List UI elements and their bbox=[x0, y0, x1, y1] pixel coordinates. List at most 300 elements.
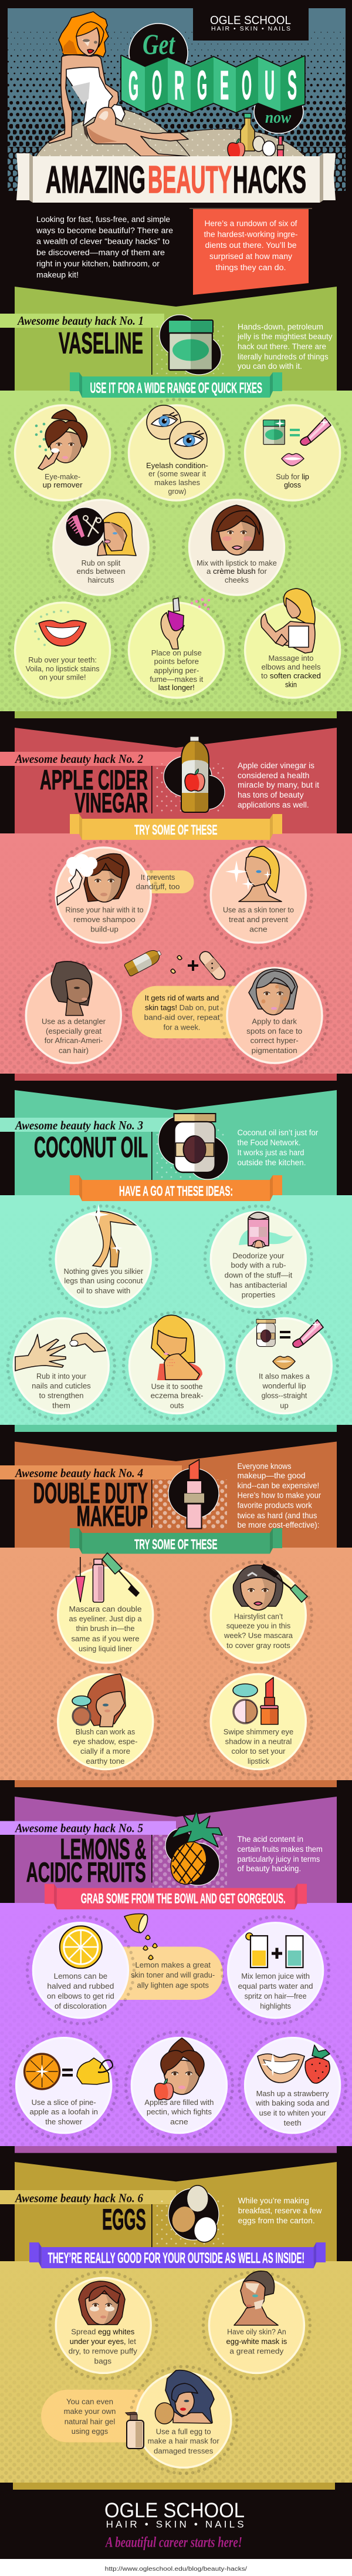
vaseline tips background bbox=[0, 391, 352, 718]
hack 2 description: has tons of beauty bbox=[238, 791, 304, 799]
tip: hair mask bbox=[126, 2366, 237, 2473]
tip text: acne bbox=[249, 926, 268, 934]
tip text: squeeze you in this bbox=[226, 1622, 290, 1630]
tip: lip gloss straight up bbox=[231, 1312, 337, 1419]
tip text bbox=[69, 2328, 138, 2366]
tip text bbox=[226, 2328, 287, 2355]
icon: vinegar bottle bbox=[151, 737, 226, 813]
callout text: dandruff bbox=[136, 873, 180, 891]
tip text: earthy tone bbox=[86, 1757, 125, 1765]
makeup header background bbox=[15, 1441, 337, 1551]
hack 1 description: you can do with it. bbox=[238, 362, 302, 371]
tip text: skin bbox=[285, 681, 297, 689]
icon: lemon slice bbox=[60, 1926, 102, 1968]
tip text: gloss bbox=[284, 481, 301, 489]
icon: lemon juice plus water bbox=[246, 1933, 303, 1968]
tip text: Use as a detangler bbox=[42, 1018, 106, 1026]
tip text: week? Use mascara bbox=[224, 1632, 293, 1640]
tip text: It also makes a bbox=[259, 1373, 310, 1381]
hack 1 title: VASELINE bbox=[59, 327, 143, 359]
tip text: lipstick bbox=[248, 1757, 270, 1765]
tip text: cheeks bbox=[225, 576, 249, 584]
woman in towel illustration bbox=[48, 12, 188, 156]
intro callout: red box: the hardest-working ingre- bbox=[204, 230, 298, 238]
tip text: nails and cuticles bbox=[32, 1382, 91, 1390]
tip text: make a hair mask for bbox=[148, 2437, 219, 2446]
footer logo: OGLE SCHOOL bbox=[104, 2499, 245, 2522]
tip: mascara on gray roots bbox=[205, 1562, 312, 1669]
icon: compact and orange lipstick bbox=[233, 1677, 278, 1724]
tip text: cially if a more bbox=[80, 1747, 130, 1756]
tip text: equal parts water and bbox=[238, 1982, 313, 1990]
icon: woman with apple bbox=[154, 2038, 204, 2100]
callout: warts and skin tags: for a week. bbox=[163, 1024, 201, 1032]
tip text: legs than using coconut bbox=[64, 1277, 143, 1285]
panel: hack 6 eggs bbox=[0, 2162, 352, 2490]
tip: apples and pectin bbox=[126, 2032, 232, 2139]
tip text: thin brush in—the bbox=[76, 1625, 135, 1633]
icon: blue-haired woman with egg bbox=[155, 2370, 214, 2424]
tip text: on elbows to get rid bbox=[47, 1992, 114, 2000]
vaseline header background bbox=[15, 287, 337, 394]
tip: strawberry whitening bbox=[239, 2032, 346, 2139]
hack 5 description: of beauty hacking. bbox=[237, 1864, 301, 1873]
icon: blonde woman with eczema bbox=[151, 1315, 202, 1380]
footer logo: HAIR • SKIN • NAILS bbox=[106, 2519, 244, 2530]
tip: detangler bbox=[20, 961, 127, 1069]
tip text: eczema break- bbox=[151, 1392, 204, 1400]
tip text: pigmentation bbox=[252, 1047, 297, 1055]
hack 1 description: literally hundreds of things bbox=[238, 352, 329, 361]
panel: hack 3 coconut oil bbox=[0, 1090, 352, 1432]
Gorgeous zigzag banner: E bbox=[220, 62, 229, 108]
hack 6 ribbon bbox=[29, 2242, 326, 2268]
callout: hair gel: natural hair gel bbox=[65, 2417, 115, 2426]
tip text: same as if you were bbox=[72, 1635, 140, 1643]
tip text: Massage into bbox=[269, 654, 314, 663]
hack 4 description: kind--can be expensive! bbox=[237, 1481, 319, 1490]
hack 5 description: particularly juicy in terms bbox=[237, 1855, 320, 1864]
tip text: (especially great bbox=[46, 1027, 102, 1035]
tip text: pectin, which fights bbox=[147, 2108, 212, 2116]
hack 1 description: Hands-down, petroleum bbox=[238, 322, 323, 331]
tip text bbox=[146, 462, 208, 496]
intro text: be discovered—many of them are bbox=[36, 248, 165, 257]
tip text: oil to shave with bbox=[77, 1287, 130, 1295]
tip text: Mash up a strawberry bbox=[256, 2090, 329, 2098]
hack 4 description: be more cost-effective): bbox=[237, 1521, 319, 1529]
Gorgeous zigzag banner: U bbox=[265, 62, 275, 108]
icon: shaved legs bbox=[88, 1204, 136, 1267]
hack 3 title: COCONUT OIL bbox=[34, 1132, 148, 1163]
hack 2 title bbox=[40, 764, 148, 818]
tip text: Sub for lip bbox=[276, 473, 309, 481]
tip text: grow) bbox=[168, 487, 187, 496]
hack 1 description: hack out there. There are bbox=[238, 342, 326, 351]
hack 2 description: applications as well. bbox=[238, 801, 309, 809]
tip text: on your smile! bbox=[39, 674, 86, 682]
logo box: HAIR • SKIN • NAILS bbox=[211, 25, 290, 32]
tip text: down of the stuff—it bbox=[225, 1271, 293, 1279]
lemons tips background bbox=[0, 1903, 352, 2153]
footer logo bbox=[104, 2499, 245, 2550]
icon: blonde woman with sparkles bbox=[225, 846, 282, 902]
hack 6 description: breakfast, reserve a few bbox=[238, 2207, 322, 2215]
tip text: Use as a skin toner to bbox=[223, 906, 294, 914]
tip text: Nothing gives you silkier bbox=[64, 1267, 143, 1276]
tip text: them bbox=[52, 1402, 70, 1410]
hack 3 ribbon: HAVE A GO AT THESE IDEAS: bbox=[119, 1183, 233, 1199]
icon: smile and strawberry bbox=[258, 2045, 330, 2083]
tip text bbox=[76, 559, 126, 584]
hack 2 description: considered a health bbox=[238, 771, 310, 780]
logo box bbox=[193, 8, 309, 41]
tip text: Voila, no lipstick stains bbox=[26, 665, 100, 673]
icon: woman with shampoo foam bbox=[57, 854, 129, 905]
tip text bbox=[224, 1613, 293, 1650]
tip text: spritz on hair—free bbox=[245, 1992, 307, 2000]
hack 4 title: DOUBLE DUTY bbox=[33, 1478, 148, 1509]
tip: deodorize bbox=[205, 1206, 312, 1313]
hack 1 description: jelly is the mightiest beauty bbox=[237, 332, 333, 341]
tip: mascara as eyeliner bbox=[52, 1553, 159, 1669]
tip: nails and cuticles bbox=[8, 1312, 114, 1419]
icon: woman with afro bbox=[51, 961, 92, 1015]
callout: warts and skin tags: band-aid over, repeat bbox=[144, 1014, 220, 1022]
icon: vaseline jar bbox=[151, 315, 226, 375]
icon: pineapple slice equals loofah bbox=[25, 2054, 113, 2089]
panel: hack 2 apple cider vinegar bbox=[0, 728, 352, 1081]
tip text: Have oily skin? An bbox=[227, 2328, 286, 2336]
tip: eye make-up remover bbox=[9, 399, 116, 506]
tip text: Rub over your teeth: bbox=[28, 656, 97, 664]
tip text bbox=[197, 559, 277, 584]
tip: rinse hair bbox=[50, 842, 157, 949]
tip text: Mix with lipstick to make bbox=[197, 559, 277, 567]
title ribbon: BEAUTY bbox=[148, 158, 232, 201]
callout shape: dandruff bbox=[124, 870, 194, 893]
tip text: Apples are filled with bbox=[144, 2099, 214, 2107]
callout: warts and skin tags: skin tags! Dab on, put bbox=[145, 1004, 219, 1012]
tip: pulse points bbox=[123, 597, 230, 704]
hack 3 label band: Awesome beauty hack No. 3 bbox=[14, 1118, 143, 1132]
hack 6 description bbox=[238, 2197, 322, 2225]
tip text: color to set your bbox=[231, 1747, 285, 1756]
eggs header background bbox=[15, 2162, 337, 2264]
icon: coconut jar equals gloss and lips bbox=[256, 1320, 323, 1369]
tip text: Place on pulse bbox=[151, 649, 202, 657]
tip text: halved and rubbed bbox=[47, 1982, 114, 1990]
callout: lemon skin toner: Lemon makes a great bbox=[135, 1961, 211, 1969]
hack 5 description: certain fruits makes them bbox=[237, 1845, 323, 1854]
coconut header background bbox=[15, 1090, 337, 1198]
tip text: with baking soda and bbox=[255, 2099, 329, 2107]
tip text: fume—makes it bbox=[150, 675, 204, 684]
icon: woman removing make-up bbox=[35, 409, 87, 470]
intro callout: red box bbox=[189, 208, 312, 295]
tip text: Hairstylist can’t bbox=[234, 1613, 283, 1621]
tip text: has antibacterial bbox=[230, 1281, 287, 1289]
icon: two eyes bbox=[147, 405, 207, 459]
hack 6 label band: Awesome beauty hack No. 6 bbox=[14, 2191, 143, 2205]
tip text bbox=[42, 1018, 106, 1055]
tip text bbox=[29, 2099, 98, 2126]
title ribbon: AMAZING bbox=[46, 158, 145, 201]
hack 2 ribbon: TRY SOME OF THESE bbox=[134, 822, 217, 838]
tip: silky legs bbox=[50, 1204, 157, 1313]
icon: lipstick bbox=[151, 1459, 227, 1529]
icon: pineapple bbox=[151, 1811, 227, 1889]
tip text: of discoloration bbox=[55, 2002, 107, 2010]
callout: lemon skin toner: ally lighten age spots bbox=[137, 1982, 209, 1990]
now badge bbox=[254, 90, 303, 133]
header illustration panel bbox=[8, 8, 346, 191]
tip text: up remover bbox=[43, 481, 83, 489]
hack 2 description: miracle by many, but it bbox=[238, 781, 319, 789]
callout: lemon skin toner: skin toner and will gradu- bbox=[131, 1971, 215, 1979]
tip text: Mix lemon juice with bbox=[241, 1972, 310, 1980]
coconut tips background bbox=[0, 1195, 352, 1432]
tip text: Lemons can be bbox=[54, 1972, 107, 1980]
hack 4 label band: Awesome beauty hack No. 4 bbox=[14, 1466, 143, 1480]
tip text: Deodorize your bbox=[232, 1252, 284, 1260]
tip text: build-up bbox=[90, 926, 119, 934]
hack 4 description: twice as hard (and thus bbox=[237, 1511, 317, 1520]
callout: hair gel bbox=[41, 2390, 144, 2442]
icon: hands and nails bbox=[15, 1333, 106, 1371]
tip text bbox=[43, 473, 83, 489]
tip text: as eyeliner. Just dip a bbox=[69, 1615, 142, 1623]
hack 2 title: VINEGAR bbox=[75, 787, 148, 818]
footer logo: A beautiful career starts here! bbox=[104, 2535, 242, 2550]
hack 4 title: MAKEUP bbox=[76, 1501, 148, 1532]
panel: hack 4 double duty makeup bbox=[0, 1441, 352, 1787]
hack 5 ribbon bbox=[45, 1884, 307, 1909]
tip text: haircuts bbox=[88, 576, 114, 584]
tip text: er (some swear it bbox=[148, 470, 207, 478]
intro text: a wealth of clever “beauty hacks” to bbox=[36, 237, 170, 246]
hack 5 title: LEMONS & bbox=[60, 1834, 146, 1865]
tip text bbox=[224, 1728, 293, 1765]
panel: hack 5 lemons and acidic fruits bbox=[0, 1797, 352, 2153]
tip: split ends bbox=[48, 494, 154, 601]
Gorgeous zigzag banner: S bbox=[287, 62, 297, 108]
acv tips background bbox=[0, 833, 352, 1081]
tip text bbox=[238, 1972, 313, 2010]
lemons header background bbox=[15, 1797, 337, 1906]
tip text: Eyelash condition- bbox=[146, 462, 208, 470]
tip text: points before bbox=[154, 658, 199, 666]
tip text: applying per- bbox=[154, 667, 199, 675]
tip text: using liquid liner bbox=[79, 1645, 132, 1653]
callout: hair gel: You can even bbox=[66, 2398, 113, 2406]
icon: hand spraying perfume bbox=[161, 598, 210, 649]
hack 4 description bbox=[237, 1462, 321, 1529]
tip text bbox=[259, 1373, 310, 1410]
tip text: eye shadow, espe- bbox=[73, 1737, 137, 1746]
tip text: under your eyes, let bbox=[70, 2338, 136, 2346]
icon: woman with under-eye mask bbox=[79, 2281, 125, 2325]
hack 3 description: Coconut oil isn’t just for bbox=[237, 1128, 319, 1137]
tip text: highlights bbox=[260, 2002, 291, 2010]
tip text: acne bbox=[170, 2118, 188, 2126]
tip text: treat and prevent bbox=[229, 916, 289, 924]
tip text: Apply to dark bbox=[252, 1018, 297, 1026]
tip text: remove shampoo bbox=[73, 916, 136, 924]
tip text bbox=[66, 906, 144, 934]
icon: blonde woman with raised elbow bbox=[261, 588, 315, 653]
tip text bbox=[246, 1018, 302, 1055]
tip: oily skin bbox=[203, 2271, 310, 2379]
icon: woman with bob and blush bbox=[211, 505, 263, 556]
hack 2 ribbon bbox=[70, 814, 282, 840]
tip text: to soften cracked bbox=[261, 672, 321, 680]
hack 2 label band: Awesome beauty hack No. 2 bbox=[14, 752, 143, 766]
tip text: Mascara can double bbox=[69, 1605, 142, 1613]
icon: conditioner bottle bbox=[126, 2412, 144, 2449]
tip text: dry, to remove puffy bbox=[69, 2347, 138, 2355]
callout: hair gel: make your own bbox=[64, 2407, 116, 2416]
hack 4 description: Here’s how to make your bbox=[237, 1491, 321, 1500]
tip text: last longer! bbox=[158, 684, 195, 692]
tip text: ends between bbox=[76, 567, 126, 576]
tip text: Rub on split bbox=[82, 559, 121, 567]
tip text: Use a full egg to bbox=[156, 2427, 211, 2436]
tip text: Spread egg whites bbox=[71, 2328, 134, 2336]
tip text: egg-white mask is bbox=[226, 2338, 287, 2346]
icon: gray-haired woman bbox=[249, 969, 297, 1015]
tip: dark spots bbox=[221, 962, 328, 1069]
intro text: ways to become beautiful? There are bbox=[36, 226, 173, 235]
tip text bbox=[69, 1605, 142, 1653]
intro callout: red box: Here’s a rundown of six of bbox=[204, 219, 297, 228]
icon: red-haired woman with compact bbox=[72, 1674, 126, 1727]
intro text: Looking for fast, fuss-free, and simple bbox=[36, 215, 170, 224]
tip: lip gloss bbox=[239, 399, 346, 506]
tip text: Use a slice of pine- bbox=[32, 2099, 96, 2107]
acv header background bbox=[15, 728, 337, 837]
hack 4 ribbon bbox=[70, 1528, 282, 1554]
hack 2 title: APPLE CIDER bbox=[40, 764, 148, 795]
tip text: to cover gray roots bbox=[226, 1642, 290, 1650]
tip text: makes lashes bbox=[154, 479, 200, 487]
hack 3 description: It works just as hard bbox=[237, 1148, 304, 1157]
Gorgeous zigzag banner bbox=[121, 56, 304, 112]
tip text: apple as a loofah in bbox=[29, 2108, 98, 2116]
hack 5 title: ACIDIC FRUITS bbox=[26, 1857, 146, 1888]
tip text bbox=[151, 1383, 204, 1410]
Gorgeous zigzag banner: R bbox=[174, 62, 184, 108]
tip text bbox=[144, 2099, 214, 2126]
Gorgeous zigzag banner: G bbox=[197, 62, 207, 108]
hack 3 description: the Food Network. bbox=[237, 1138, 300, 1147]
tip text bbox=[26, 656, 100, 682]
tip text: can hair) bbox=[59, 1047, 89, 1055]
hack 6 description: eggs from the carton. bbox=[238, 2217, 315, 2225]
tip text bbox=[148, 2427, 219, 2456]
tip text: elbows and heels bbox=[262, 663, 320, 671]
Get badge: Get bbox=[143, 28, 176, 60]
icon: jar equals tube and lips bbox=[263, 418, 331, 466]
tip text: Use it to soothe bbox=[151, 1383, 203, 1391]
icon: vinegar bottle plus band-aid bbox=[124, 947, 228, 982]
intro text: right in your kitchen, bathroom, or bbox=[36, 260, 160, 268]
hack 4 description: makeup—the good bbox=[237, 1471, 305, 1480]
tip: shimmery eye shadow over lipstick bbox=[205, 1668, 312, 1775]
callout: hair gel: using eggs bbox=[72, 2427, 108, 2436]
tip: skin toner bbox=[205, 842, 312, 949]
tip text: Blush can work as bbox=[76, 1728, 135, 1736]
tip text bbox=[73, 1728, 137, 1765]
intro callout: red box: dients out there. You’ll be bbox=[205, 241, 297, 250]
tip: rub over teeth bbox=[9, 597, 116, 704]
callout: lemon skin toner bbox=[119, 1913, 223, 2000]
header still life: bottle, apple, eggs, lipstick bbox=[228, 113, 284, 158]
logo box: OGLE SCHOOL bbox=[210, 14, 291, 27]
tip text bbox=[47, 1972, 114, 2010]
tip text: a great remedy bbox=[229, 2347, 284, 2355]
icon: liner brush and mascara bbox=[76, 1553, 140, 1602]
tip text: up bbox=[280, 1402, 289, 1410]
callout: warts and skin tags: It gets rid of warts and bbox=[145, 994, 219, 1003]
hack 4 ribbon: TRY SOME OF THESE bbox=[134, 1537, 217, 1553]
source url strip: http://www.ogleschool.edu/blog/beauty-hacks/ bbox=[105, 2565, 247, 2572]
tip: eczema bbox=[123, 1312, 230, 1419]
tip text: the shower bbox=[45, 2118, 82, 2126]
hack 3 ribbon bbox=[70, 1175, 282, 1201]
tip: creme blush bbox=[183, 494, 290, 601]
title ribbon bbox=[16, 153, 336, 203]
tip text: Eye-make- bbox=[45, 473, 80, 481]
tip text: Swipe shimmery eye bbox=[224, 1728, 293, 1736]
hack 5 label band: Awesome beauty hack No. 5 bbox=[14, 1821, 143, 1835]
tip text bbox=[223, 906, 294, 934]
tip text: Rinse your hair with it to bbox=[66, 906, 144, 914]
tip: lemon juice highlights bbox=[222, 1917, 329, 2024]
tip: pineapple loofah bbox=[11, 2032, 117, 2139]
callout text: dandruff: It prevents bbox=[141, 873, 175, 882]
callout text: dandruff: dandruff, too bbox=[136, 883, 180, 891]
now badge: now bbox=[265, 109, 291, 127]
icon: three eggs bbox=[151, 2185, 226, 2247]
hack 1 ribbon bbox=[70, 372, 282, 398]
icon: red smiling lips bbox=[34, 610, 86, 646]
icon: coconut oil jar bbox=[151, 1114, 228, 1180]
tip: blush as eye shadow bbox=[52, 1668, 159, 1775]
tip text: to strengthen bbox=[39, 1392, 84, 1400]
tip text bbox=[261, 654, 321, 689]
icon: woman with egg-white mask bbox=[234, 2271, 278, 2325]
tip text bbox=[276, 473, 309, 489]
intro callout: red box: surprised at how many bbox=[209, 252, 292, 261]
icon: comb, scissors and blonde woman bbox=[66, 507, 136, 556]
tip text: for African-Ameri- bbox=[45, 1037, 103, 1045]
Gorgeous zigzag banner: O bbox=[152, 62, 162, 108]
icon: woman with mascara wand bbox=[233, 1563, 307, 1610]
tip text bbox=[255, 2090, 329, 2127]
hack 6 description: While you’re making bbox=[238, 2197, 309, 2205]
makeup tips background bbox=[0, 1548, 352, 1787]
tip text: wonderful lip bbox=[262, 1382, 306, 1390]
tip text: bags bbox=[94, 2358, 111, 2366]
callout: warts and skin tags bbox=[124, 947, 236, 1038]
hack 3 description bbox=[237, 1128, 319, 1167]
intro text bbox=[36, 215, 173, 280]
tip text: use it to whiten your bbox=[259, 2109, 326, 2117]
tip text: spots on face to bbox=[246, 1027, 302, 1035]
sand hills bbox=[35, 110, 306, 157]
tip text: damaged tresses bbox=[154, 2447, 213, 2456]
